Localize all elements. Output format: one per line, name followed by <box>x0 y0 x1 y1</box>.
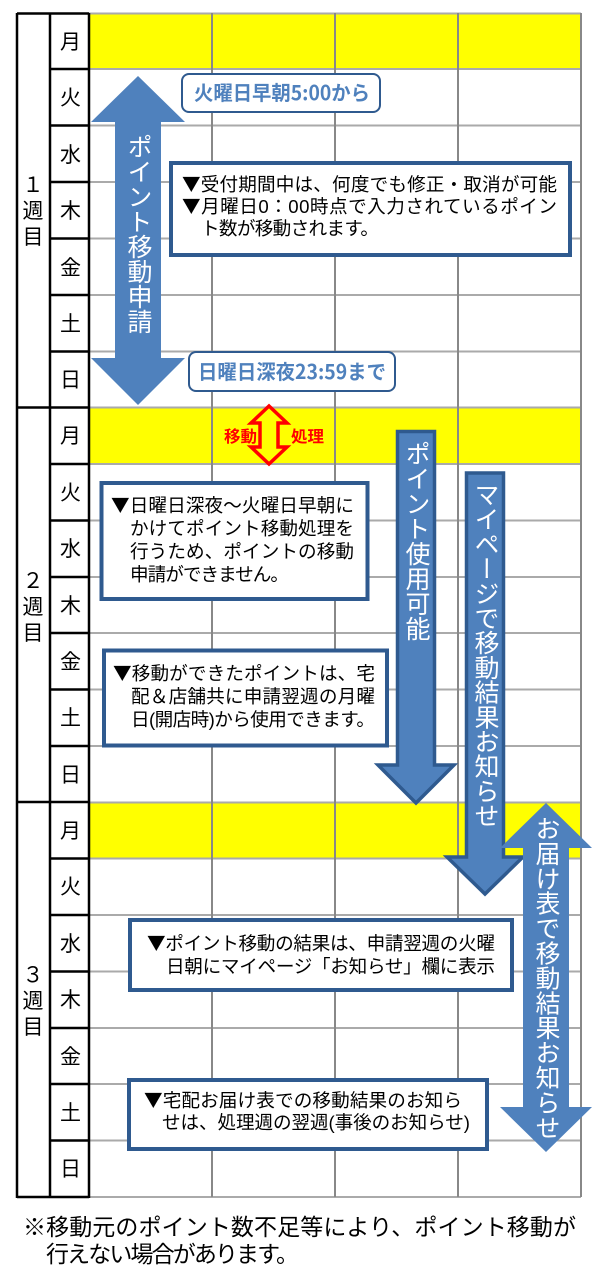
weekday labels week 3: 土 <box>60 1102 81 1125</box>
arrow: delivery slip result notice double arrow <box>500 803 592 1152</box>
panel: point usage note: 日(開店時)から使用できます。 <box>131 709 375 730</box>
panel: processing period note: 申請ができません。 <box>130 564 289 585</box>
weekday labels week 1: 日 <box>60 369 81 392</box>
panel: processing period note <box>102 483 368 599</box>
weekday labels week 3: 火 <box>60 876 81 899</box>
panel: processing period note: ▼日曜日深夜～火曜日早朝に <box>111 491 354 518</box>
week 3 label: 週 <box>22 990 44 1013</box>
panel: application period notes: ト数が移動されます。 <box>201 218 379 239</box>
week 2 label: 週 <box>22 596 44 619</box>
arrow: red transfer processing arrow: 処理 <box>291 428 324 446</box>
week 1 label <box>22 174 44 249</box>
footnote <box>23 1214 576 1267</box>
arrow: delivery slip result notice double arrow: お届け表で移動結果お知らせ <box>532 816 560 1140</box>
week 1 label: 週 <box>22 200 44 223</box>
panel: point usage note: ▼移動ができたポイントは、宅 <box>113 659 375 686</box>
arrow: application period double arrow: ポイント移動申請 <box>124 134 152 334</box>
arrow: points usable: ポイント使用可能 <box>402 441 430 641</box>
schedule grid background <box>89 13 581 1197</box>
panel: my page notice note: ▼ポイント移動の結果は、申請翌週の火曜 <box>147 929 495 956</box>
panel: my page notice note: 日朝にマイページ「お知らせ」欄に表示 <box>166 956 495 977</box>
weekday labels week 3: 月 <box>60 820 81 843</box>
arrow: application period double arrow <box>91 76 185 405</box>
callout: end time pill: 日曜日深夜23:59まで <box>198 356 386 385</box>
weekday labels week 3 <box>60 820 81 1181</box>
weekday labels week 2 <box>60 425 81 787</box>
week 2 label <box>22 570 44 645</box>
weekday labels week 2: 日 <box>60 764 81 787</box>
weekday labels week 1: 水 <box>60 144 81 167</box>
weekday labels week 3: 水 <box>60 933 81 956</box>
callout: end time pill <box>189 352 395 391</box>
panel: processing period note: かけてポイント移動処理を <box>130 518 354 539</box>
arrow: my page result notice: マイページで移動結果お知らせ <box>471 482 500 828</box>
week 1 label: 目 <box>22 226 44 249</box>
week and weekday column frame <box>17 13 89 1198</box>
panel: application period notes: ▼受付期間中は、何度でも修正・取消が可能 <box>182 170 557 197</box>
arrow: red transfer processing arrow <box>224 406 324 464</box>
panel: application period notes <box>171 163 570 255</box>
panel: point usage note: 配＆店舗共に申請翌週の月曜 <box>131 686 375 707</box>
week 2 label: ２ <box>22 570 44 593</box>
weekday labels week 3: 日 <box>60 1158 81 1181</box>
panel: point usage note <box>104 650 387 746</box>
weekday labels week 2: 火 <box>60 482 81 505</box>
footnote: ※移動元のポイント数不足等により、ポイント移動が <box>23 1214 576 1240</box>
week 3 label: ３ <box>22 964 44 987</box>
arrow: red transfer processing arrow: 移動 <box>224 428 257 446</box>
arrow: my page result notice <box>447 473 523 894</box>
weekday labels week 2: 水 <box>60 538 81 561</box>
callout: start time pill: 火曜日早朝5:00から <box>194 77 370 106</box>
panel: delivery slip note: せは、処理週の翌週(事後のお知らせ) <box>162 1112 470 1133</box>
weekday labels week 2: 金 <box>60 651 81 674</box>
weekday labels week 3: 木 <box>60 989 81 1012</box>
week 2 label: 目 <box>22 622 44 645</box>
weekday labels week 2: 月 <box>60 425 81 448</box>
arrow: points usable <box>378 432 454 803</box>
panel: delivery slip note <box>129 1080 487 1149</box>
weekday labels week 2: 土 <box>60 707 81 730</box>
weekday labels week 1: 月 <box>60 31 81 54</box>
weekday labels week 1: 土 <box>60 313 81 336</box>
panel: application period notes: ▼月曜日0：00時点で入力されているポイン <box>182 192 557 219</box>
week 1 label: １ <box>22 174 44 197</box>
weekday labels week 1 <box>60 31 81 392</box>
footnote: 行えない場合があります。 <box>46 1241 299 1267</box>
weekday labels week 1: 金 <box>60 257 81 280</box>
weekday labels week 3: 金 <box>60 1046 81 1069</box>
panel: my page notice note <box>130 920 512 990</box>
weekday labels week 1: 火 <box>60 87 81 110</box>
weekday labels week 2: 木 <box>60 595 81 618</box>
panel: processing period note: 行うため、ポイントの移動 <box>130 541 354 562</box>
week 3 label: 目 <box>22 1016 44 1039</box>
panel: delivery slip note: ▼宅配お届け表での移動結果のお知ら <box>144 1086 462 1113</box>
week 3 label <box>22 964 44 1039</box>
weekday labels week 1: 木 <box>60 200 81 223</box>
